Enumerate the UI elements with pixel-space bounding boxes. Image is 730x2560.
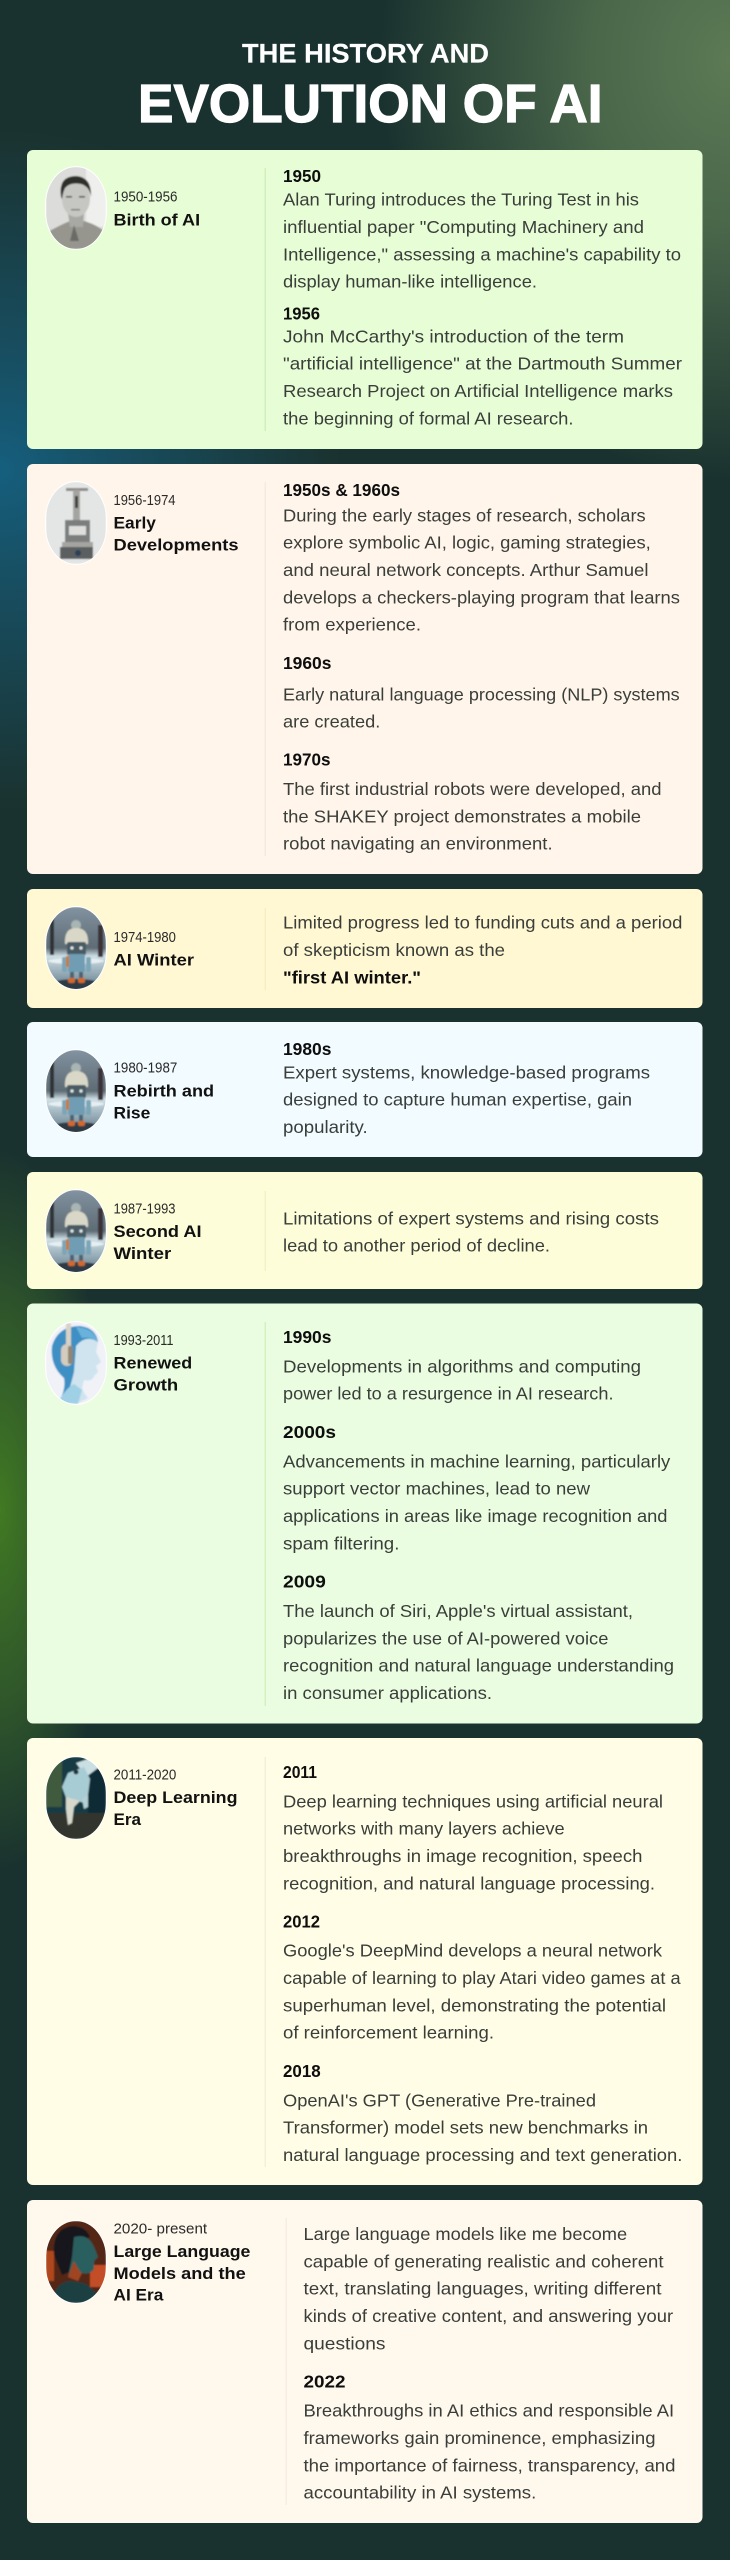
entry: 2000s: support vector machines, lead to new [283,1479,590,1499]
era label: Deep Learning [114,1788,238,1807]
entry: 1956: the beginning of formal AI research. [283,408,574,428]
era label: Birth of AI [114,211,200,230]
entry: 1960s: are created. [283,712,380,732]
entry: 2018: 2018 [283,2061,321,2081]
entry: 2022: accountability in AI systems. [304,2483,536,2503]
entry: 2012: superhuman level, demonstrating the potential [283,1995,666,2015]
description: text, translating languages, writing different [304,2279,662,2299]
portrait: robot in snow [45,906,107,991]
entry: 2012: 2012 [283,1911,320,1931]
card background [27,1304,702,1724]
title: THE HISTORY AND [242,38,489,68]
portrait: head with headphones [45,1321,107,1405]
era label: AI Era [114,2286,164,2305]
era label [114,930,194,970]
entry: 1950s and 1960s: 1950s & 1960s [283,480,400,500]
era label: AI Winter [114,951,194,970]
entry: 2009: 2009 [283,1572,326,1592]
description: kinds of creative content, and answering your [304,2306,673,2326]
entry: 2000s: Advancements in machine learning, particularly [283,1451,671,1471]
title [138,38,602,134]
portrait: robot hand [45,1756,107,1840]
entry: 1950s and 1960s: and neural network concepts. Arthur Samuel [283,560,648,580]
entry: 1950: Intelligence," assessing a machine's capability to [283,244,681,264]
entry: 1956: 1956 [283,303,320,323]
era label: 1980-1987 [114,1061,177,1077]
entry: 2009: in consumer applications. [283,1683,492,1703]
era label: Large Language [114,2242,250,2261]
entry: 1960s: Early natural language processing (NLP) systems [283,684,680,704]
entry: 2011: Deep learning techniques using artificial neural [283,1791,663,1811]
panel: Second AI Winter [27,1172,702,1289]
panel: AI Winter [27,889,702,1008]
entry: 2000s: 2000s [283,1422,336,1442]
entry: 1970s: robot navigating an environment. [283,834,553,854]
era label [114,190,200,230]
entry: 2000s: applications in areas like image recognition and [283,1506,668,1526]
entry: 1950s and 1960s: develops a checkers-playing program that learns [283,587,680,607]
era label: Rebirth and [114,1081,214,1100]
description: Limitations of expert systems and rising costs [283,1208,659,1228]
entry: 1970s: The first industrial robots were developed, and [283,779,662,799]
entry: 1980s: 1980s [283,1039,332,1059]
era label: 1950-1956 [114,190,178,206]
era label: Growth [114,1376,178,1395]
era label [114,493,238,554]
panel: Renewed Growth [27,1304,702,1724]
title: EVOLUTION OF AI [138,74,602,134]
era label: 1993-2011 [114,1333,174,1349]
entry: 2022 [304,2371,676,2503]
entry: 1980s: Expert systems, knowledge-based programs [283,1062,650,1082]
era label: 1987-1993 [114,1201,176,1217]
entry: 2009: popularizes the use of AI-powered voice [283,1628,608,1648]
panel: Early Developments [27,464,702,874]
era label: 2020- present [114,2221,207,2237]
entry: 1950s and 1960s: from experience. [283,615,421,635]
era label: 1974-1980 [114,930,176,946]
entry: 2009: The launch of Siri, Apple's virtual assistant, [283,1601,633,1621]
description [283,1208,659,1256]
portrait: robot in snow [45,1049,107,1134]
entry: 2009 [283,1572,674,1703]
era label: Models and the [114,2264,246,2283]
era label [114,1767,238,1829]
entry: 2011: networks with many layers achieve [283,1819,565,1839]
entry: 2012: of reinforcement learning. [283,2023,494,2043]
entry: 1950s and 1960s: explore symbolic AI, logic, gaming strategies, [283,533,651,553]
entry: 1980s [283,1039,650,1137]
panel: Rebirth and Rise [27,1022,702,1157]
description [283,913,682,987]
description [304,2224,673,2353]
card background [27,1738,702,2185]
description: capable of generating realistic and coherent [304,2251,664,2271]
card background [27,889,702,1008]
era label: Developments [114,535,238,554]
portrait: Shakey robot [45,481,107,565]
entry: 2009: recognition and natural language understanding [283,1656,674,1676]
entry: 1990s [283,1327,641,1404]
era label [114,1333,192,1395]
entry: 1950 [283,166,681,292]
era label: Early [114,513,156,532]
era label: Rise [114,1103,150,1122]
portrait: robot in snow [45,1189,107,1274]
panel: Birth of AI [27,150,702,449]
era label [114,2221,250,2305]
entry: 2011: recognition, and natural language processing. [283,1873,655,1893]
entry: 2012: Google's DeepMind develops a neural network [283,1941,662,1961]
entry: 1950: display human-like intelligence. [283,272,537,292]
entry: 1956: Research Project on Artificial Intelligence marks [283,381,673,401]
description: of skepticism known as the [283,940,505,960]
entry: 1980s: designed to capture human expertise, gain [283,1090,632,1110]
entry: 2022: Breakthroughs in AI ethics and responsible AI [304,2401,674,2421]
entry: 1990s: 1990s [283,1327,332,1347]
era label [114,1201,202,1263]
description: Large language models like me become [304,2224,627,2244]
entry: 1990s: power led to a resurgence in AI research. [283,1384,614,1404]
entry: 2018 [283,2061,682,2165]
entry: 1990s: Developments in algorithms and computing [283,1356,641,1376]
entry: 1950: Alan Turing introduces the Turing Test in his [283,190,639,210]
card background [27,464,702,874]
era label: Renewed [114,1354,192,1373]
card background [27,150,702,449]
entry: 2018: OpenAI's GPT (Generative Pre-trained [283,2090,596,2110]
description: questions [304,2333,386,2353]
panel: Deep Learning Era [27,1738,702,2185]
entry: 1950s and 1960s: During the early stages of research, scholars [283,505,646,525]
card background [27,2200,702,2523]
portrait: woman in red and teal light [45,2220,107,2304]
entry: 2018: Transformer) model sets new benchmarks in [283,2118,648,2138]
entry: 1956: "artificial intelligence" at the Dartmouth Summer [283,354,682,374]
entry: 1950: influential paper "Computing Machinery and [283,217,644,237]
entry: 1950: 1950 [283,166,321,186]
entry: 1970s [283,750,662,854]
entry: 1970s: the SHAKEY project demonstrates a mobile [283,806,641,826]
era label: Winter [114,1244,172,1263]
entry: 1950s and 1960s [283,480,680,635]
panel: Large Language Models and the AI Era [27,2200,702,2523]
description: lead to another period of decline. [283,1236,550,1256]
entry: 2022: frameworks gain prominence, emphasizing [304,2428,656,2448]
entry: 2011: breakthroughs in image recognition, speech [283,1846,642,1866]
entry: 2000s [283,1422,671,1553]
entry: 1956: John McCarthy's introduction of the term [283,326,624,346]
entry: 2018: natural language processing and text generation. [283,2145,682,2165]
era label: Second AI [114,1222,202,1241]
era label [114,1061,214,1122]
entry: 1956 [283,303,682,428]
description: Limited progress led to funding cuts and a period [283,913,682,933]
entry: 1960s [283,653,680,732]
entry: 2012: capable of learning to play Atari video games at a [283,1968,681,1988]
entry: 1980s: popularity. [283,1117,368,1137]
entry: 1970s: 1970s [283,750,331,770]
era label: 1956-1974 [114,493,176,509]
entry: 2011: 2011 [283,1762,317,1782]
entry: 1960s: 1960s [283,653,332,673]
description: "first AI winter." [283,967,421,987]
era label: 2011-2020 [114,1767,176,1783]
entry: 2012 [283,1911,681,2043]
portrait: Alan Turing [45,166,107,250]
entry: 2022: 2022 [304,2371,346,2391]
card background [27,1022,702,1157]
era label: Era [114,1810,142,1829]
card background [27,1172,702,1289]
entry: 2022: the importance of fairness, transparency, and [304,2455,676,2475]
entry: 2011 [283,1762,663,1893]
entry: 2000s: spam filtering. [283,1533,399,1553]
